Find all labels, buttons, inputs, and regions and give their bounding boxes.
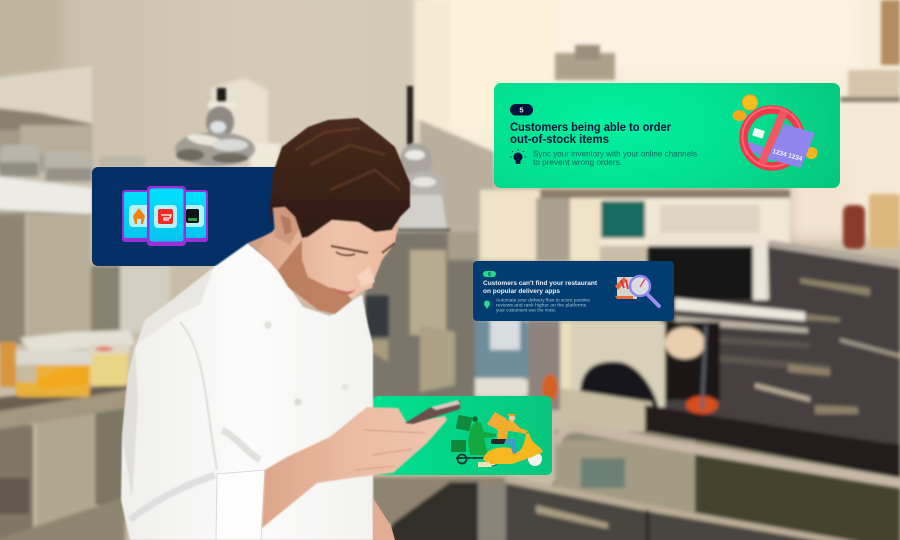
water bottle and back wall	[448, 258, 474, 418]
white bin	[560, 388, 652, 430]
chef ear	[273, 207, 300, 245]
heading	[483, 281, 597, 295]
heading: on popular delivery apps	[483, 289, 561, 295]
glass counter	[505, 430, 900, 540]
icon: prohibited credit card with coins: 1234 1234	[771, 148, 803, 163]
icon: lightbulb	[510, 149, 526, 164]
chef lower hand	[373, 498, 395, 540]
shelf and teal box	[540, 190, 790, 198]
chip: step number: 5	[519, 106, 524, 115]
lower left columns	[0, 214, 25, 344]
counter behind the hand	[372, 477, 505, 524]
right silver lamp	[407, 86, 413, 146]
bottom drawers	[505, 480, 850, 540]
upper right wall detail	[415, 0, 450, 135]
body text	[496, 298, 591, 312]
sauce and pasta	[843, 205, 865, 249]
icon: green delivery rider	[451, 415, 496, 464]
heading	[510, 122, 672, 146]
chef eye, nose and mouth	[331, 243, 395, 253]
microwave	[648, 246, 758, 302]
white shelf	[0, 176, 92, 214]
chef hair	[270, 118, 410, 238]
body text: reviews and rank higher on the platforms	[496, 302, 586, 308]
chef	[121, 118, 460, 540]
far left ledge	[0, 66, 92, 123]
steel side cabinets	[640, 242, 900, 480]
paper behind the lamp	[210, 78, 268, 145]
body text: Sync your inventory with your online channels	[533, 150, 697, 158]
body text: Automate your delivery flow to score positive	[496, 298, 591, 302]
heading: out-of-stock items	[510, 134, 609, 146]
chip: step number	[483, 271, 496, 278]
glass jars	[0, 145, 40, 178]
heading: Customers can't find your restaurant	[483, 281, 597, 287]
icon: prohibited credit card with coins	[732, 95, 818, 167]
body text	[533, 150, 697, 167]
panel: dark blue app card	[92, 167, 292, 266]
food containers	[20, 330, 135, 352]
right wall items	[555, 53, 615, 80]
chef jacket	[121, 243, 373, 540]
icon: location tip	[484, 300, 490, 309]
chef forearm and hand	[262, 407, 447, 528]
chip: step number: 6	[488, 272, 491, 278]
chef neck and face	[248, 118, 410, 314]
panel: big green card about out-of-stock items	[494, 83, 840, 188]
dark band	[645, 405, 900, 482]
body text: to prevent wrong orders.	[533, 158, 622, 167]
centre pillar items	[365, 232, 475, 400]
panel: green delivery scooter card	[373, 396, 552, 475]
phone	[405, 400, 460, 424]
icon: yellow scooter rider with box	[478, 412, 543, 467]
chef beard	[278, 240, 352, 314]
icon: three phones with delivery apps	[122, 186, 208, 246]
steel food shelf	[0, 383, 127, 414]
left silver lamp	[175, 86, 450, 232]
panel: small blue card about delivery apps	[473, 261, 674, 321]
chip: step number	[510, 104, 533, 116]
icon: magnifying glass over chart	[615, 276, 659, 306]
chef sleeve cuff	[216, 470, 265, 540]
body text: your customers use the most.	[496, 308, 556, 312]
heading: Customers being able to order	[510, 122, 672, 134]
